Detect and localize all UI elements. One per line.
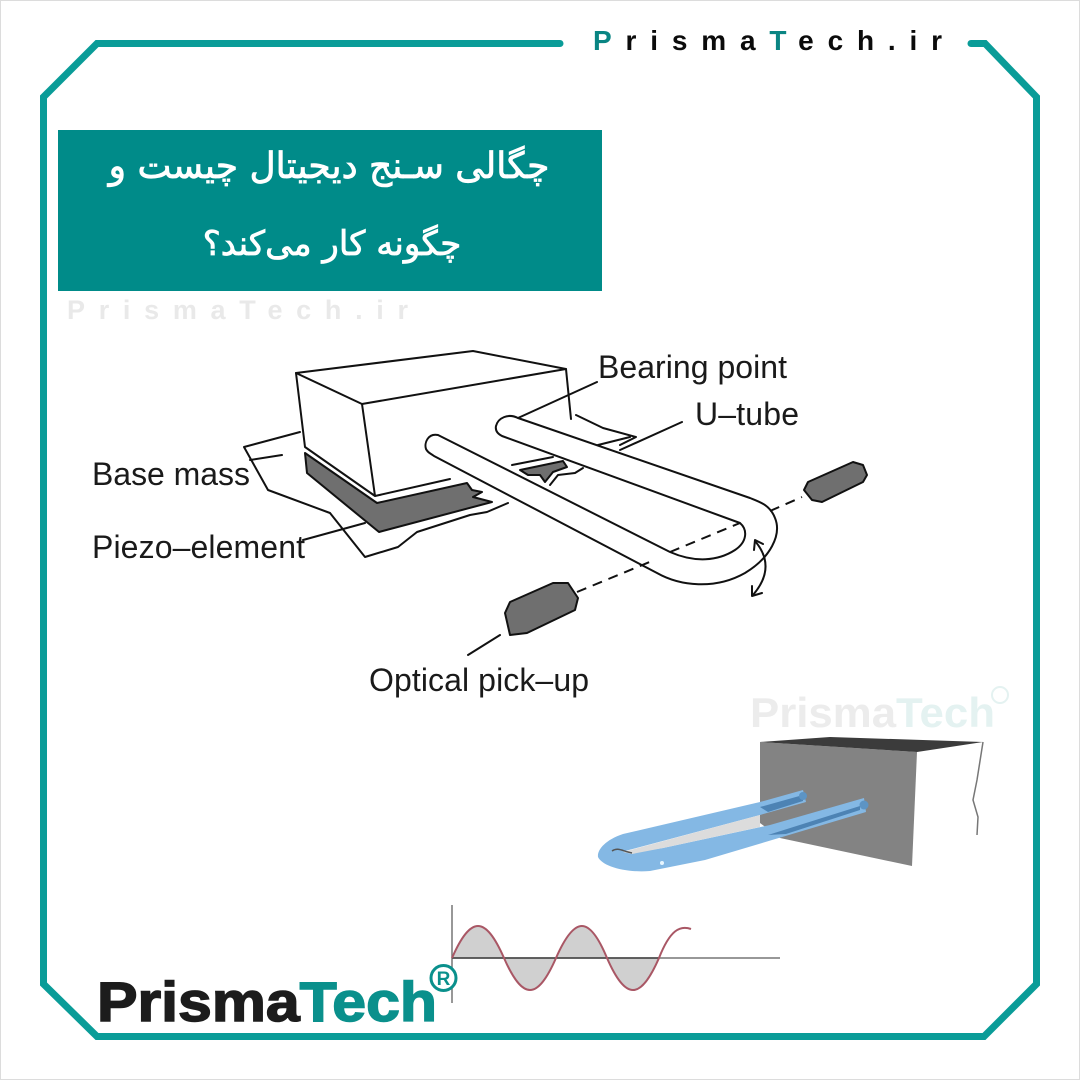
dashed optical axis bbox=[577, 497, 802, 592]
U-tube bbox=[426, 416, 777, 584]
title box bbox=[58, 130, 602, 291]
label: U-tube: U–tube bbox=[695, 396, 799, 432]
base mass block bbox=[296, 351, 571, 496]
cutaway fragment bbox=[512, 457, 583, 485]
base sheet outline bbox=[244, 415, 636, 557]
3D vibrating tube illustration bbox=[598, 737, 983, 871]
label: Base mass: Base mass bbox=[92, 456, 250, 492]
watermark under title: PrismaTech.ir bbox=[67, 295, 408, 325]
U-tube densimeter diagram bbox=[92, 349, 867, 698]
header site name: P risma T ech.ir bbox=[593, 25, 942, 56]
label: Optical pick-up: Optical pick–up bbox=[369, 662, 589, 698]
label: Piezo-element: Piezo–element bbox=[92, 529, 305, 565]
registered mark: R bbox=[437, 969, 451, 990]
title box: چگونه کار می‌کند؟ bbox=[203, 224, 461, 264]
title box: چگالی سـنج دیجیتال چیست و bbox=[107, 145, 549, 187]
vibration arrow bbox=[752, 540, 766, 596]
mounting block bbox=[760, 737, 983, 866]
watermark logo: PrismaTech bbox=[750, 689, 995, 736]
optical pick-up large bbox=[505, 583, 578, 635]
piezo element bbox=[305, 453, 492, 532]
registered mark bbox=[431, 966, 456, 990]
optical pick-up small bbox=[804, 462, 867, 502]
sine wave chart bbox=[452, 905, 780, 1003]
blue U-tube bbox=[598, 790, 868, 871]
PrismaTech logo: Prisma Tech bbox=[97, 970, 437, 1033]
leader lines bbox=[250, 382, 682, 655]
label: Bearing point: Bearing point bbox=[598, 349, 787, 385]
